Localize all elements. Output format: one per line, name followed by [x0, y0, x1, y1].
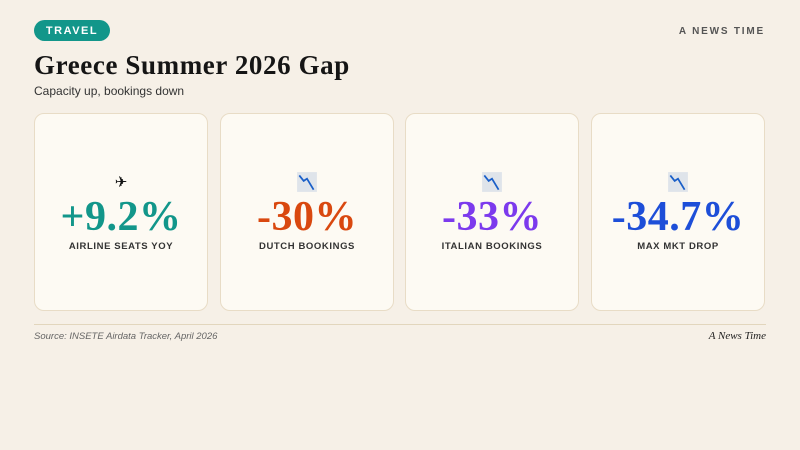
card: dutch [220, 113, 394, 311]
source note: Source: INSETE Airdata Tracker, April 2026 [34, 331, 217, 342]
stat label: MAX MKT DROP [637, 241, 719, 252]
icon: chart down [297, 172, 317, 192]
stat number: -34.7% [612, 194, 744, 240]
brand: A NEWS TIME [679, 26, 765, 37]
card: max market drop [591, 113, 765, 311]
title: Greece Summer 2026 Gap [34, 50, 350, 80]
icon: plane: ✈ [115, 174, 127, 191]
signature: A News Time [709, 330, 766, 342]
stat number: -33% [442, 194, 542, 240]
icon: chart down [668, 172, 688, 192]
stat number: +9.2% [61, 194, 181, 240]
stat number: -30% [257, 194, 357, 240]
stat label: AIRLINE SEATS YOY [69, 241, 173, 252]
stat label: ITALIAN BOOKINGS [442, 241, 542, 252]
stat label: DUTCH BOOKINGS [259, 241, 355, 252]
card: italian [405, 113, 579, 311]
subtitle: Capacity up, bookings down [34, 84, 184, 98]
tag: travel: TRAVEL [46, 25, 98, 37]
tag: travel [34, 20, 110, 41]
card: airline seats [34, 113, 208, 311]
icon: chart down [482, 172, 502, 192]
